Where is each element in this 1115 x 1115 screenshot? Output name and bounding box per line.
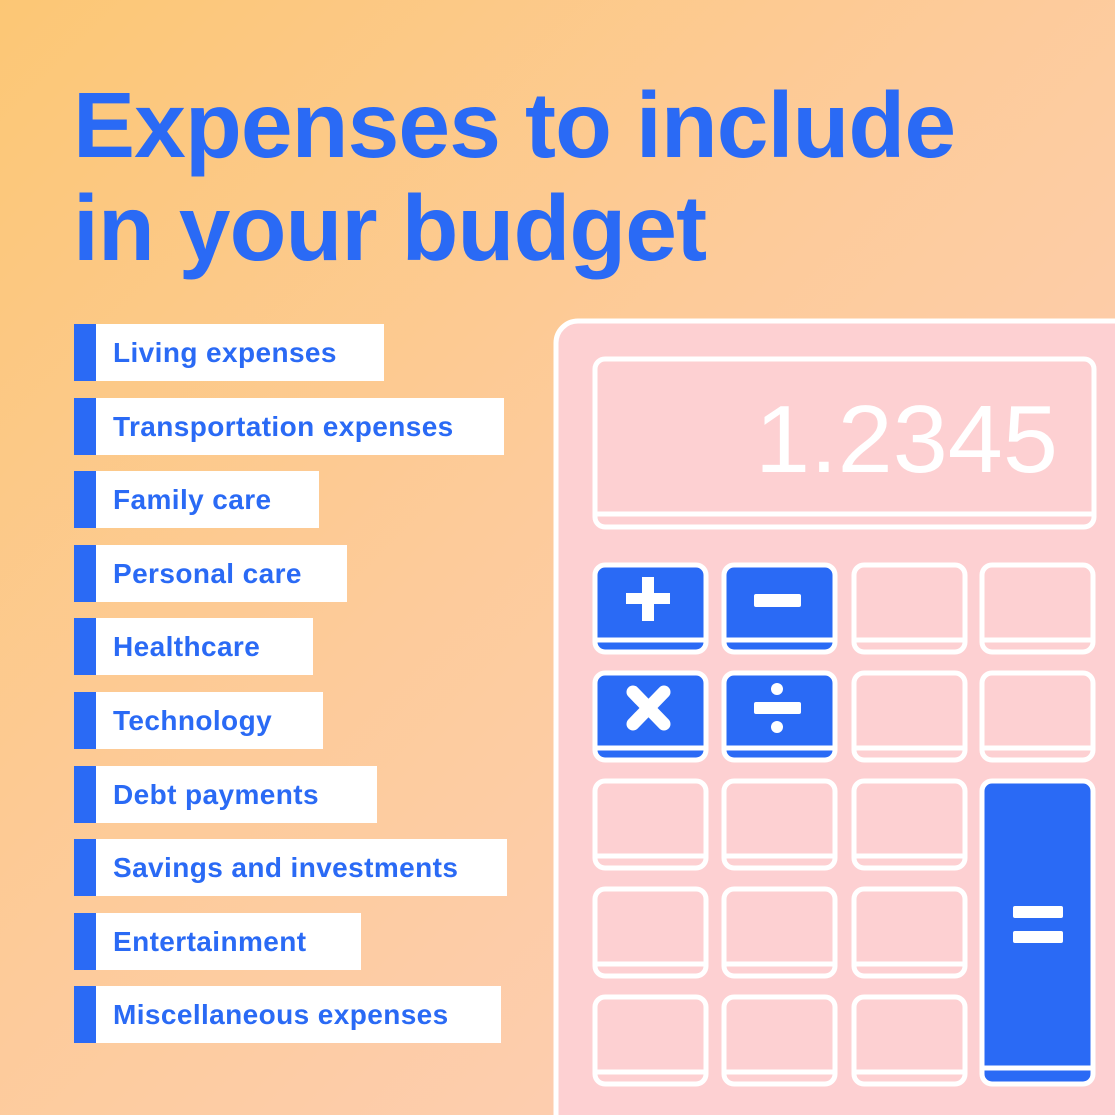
item: healthcare: Healthcare	[113, 631, 260, 662]
item: savings: Savings and investments	[113, 852, 458, 883]
display	[595, 359, 1094, 527]
item: living	[74, 324, 384, 381]
operator keys	[595, 565, 835, 760]
item: misc: Miscellaneous expenses	[113, 999, 449, 1030]
times	[633, 692, 664, 724]
item: entertainment	[74, 913, 361, 970]
title: in your budget	[73, 176, 706, 280]
item: family care	[74, 471, 319, 528]
item: technology: Technology	[113, 705, 272, 736]
title	[73, 73, 955, 280]
item: debt	[74, 766, 377, 823]
item: technology	[74, 692, 323, 749]
equals key	[982, 781, 1093, 1084]
item: transportation: Transportation expenses	[113, 411, 454, 442]
item: misc	[74, 986, 501, 1043]
item: family care: Family care	[113, 484, 272, 515]
item: entertainment: Entertainment	[113, 926, 306, 957]
item: savings	[74, 839, 507, 896]
display: 1.2345	[755, 386, 1058, 493]
plus	[626, 577, 670, 621]
calculator body	[556, 321, 1115, 1115]
keys	[595, 565, 1093, 1084]
item: debt: Debt payments	[113, 779, 319, 810]
item: healthcare	[74, 618, 313, 675]
list: expense categories	[74, 324, 507, 1043]
item: living: Living expenses	[113, 337, 337, 368]
divide	[754, 702, 801, 714]
minus	[754, 594, 801, 607]
item: transportation	[74, 398, 504, 455]
item: personal care: Personal care	[113, 558, 302, 589]
item: personal care	[74, 545, 347, 602]
title: Expenses to include	[73, 73, 955, 177]
